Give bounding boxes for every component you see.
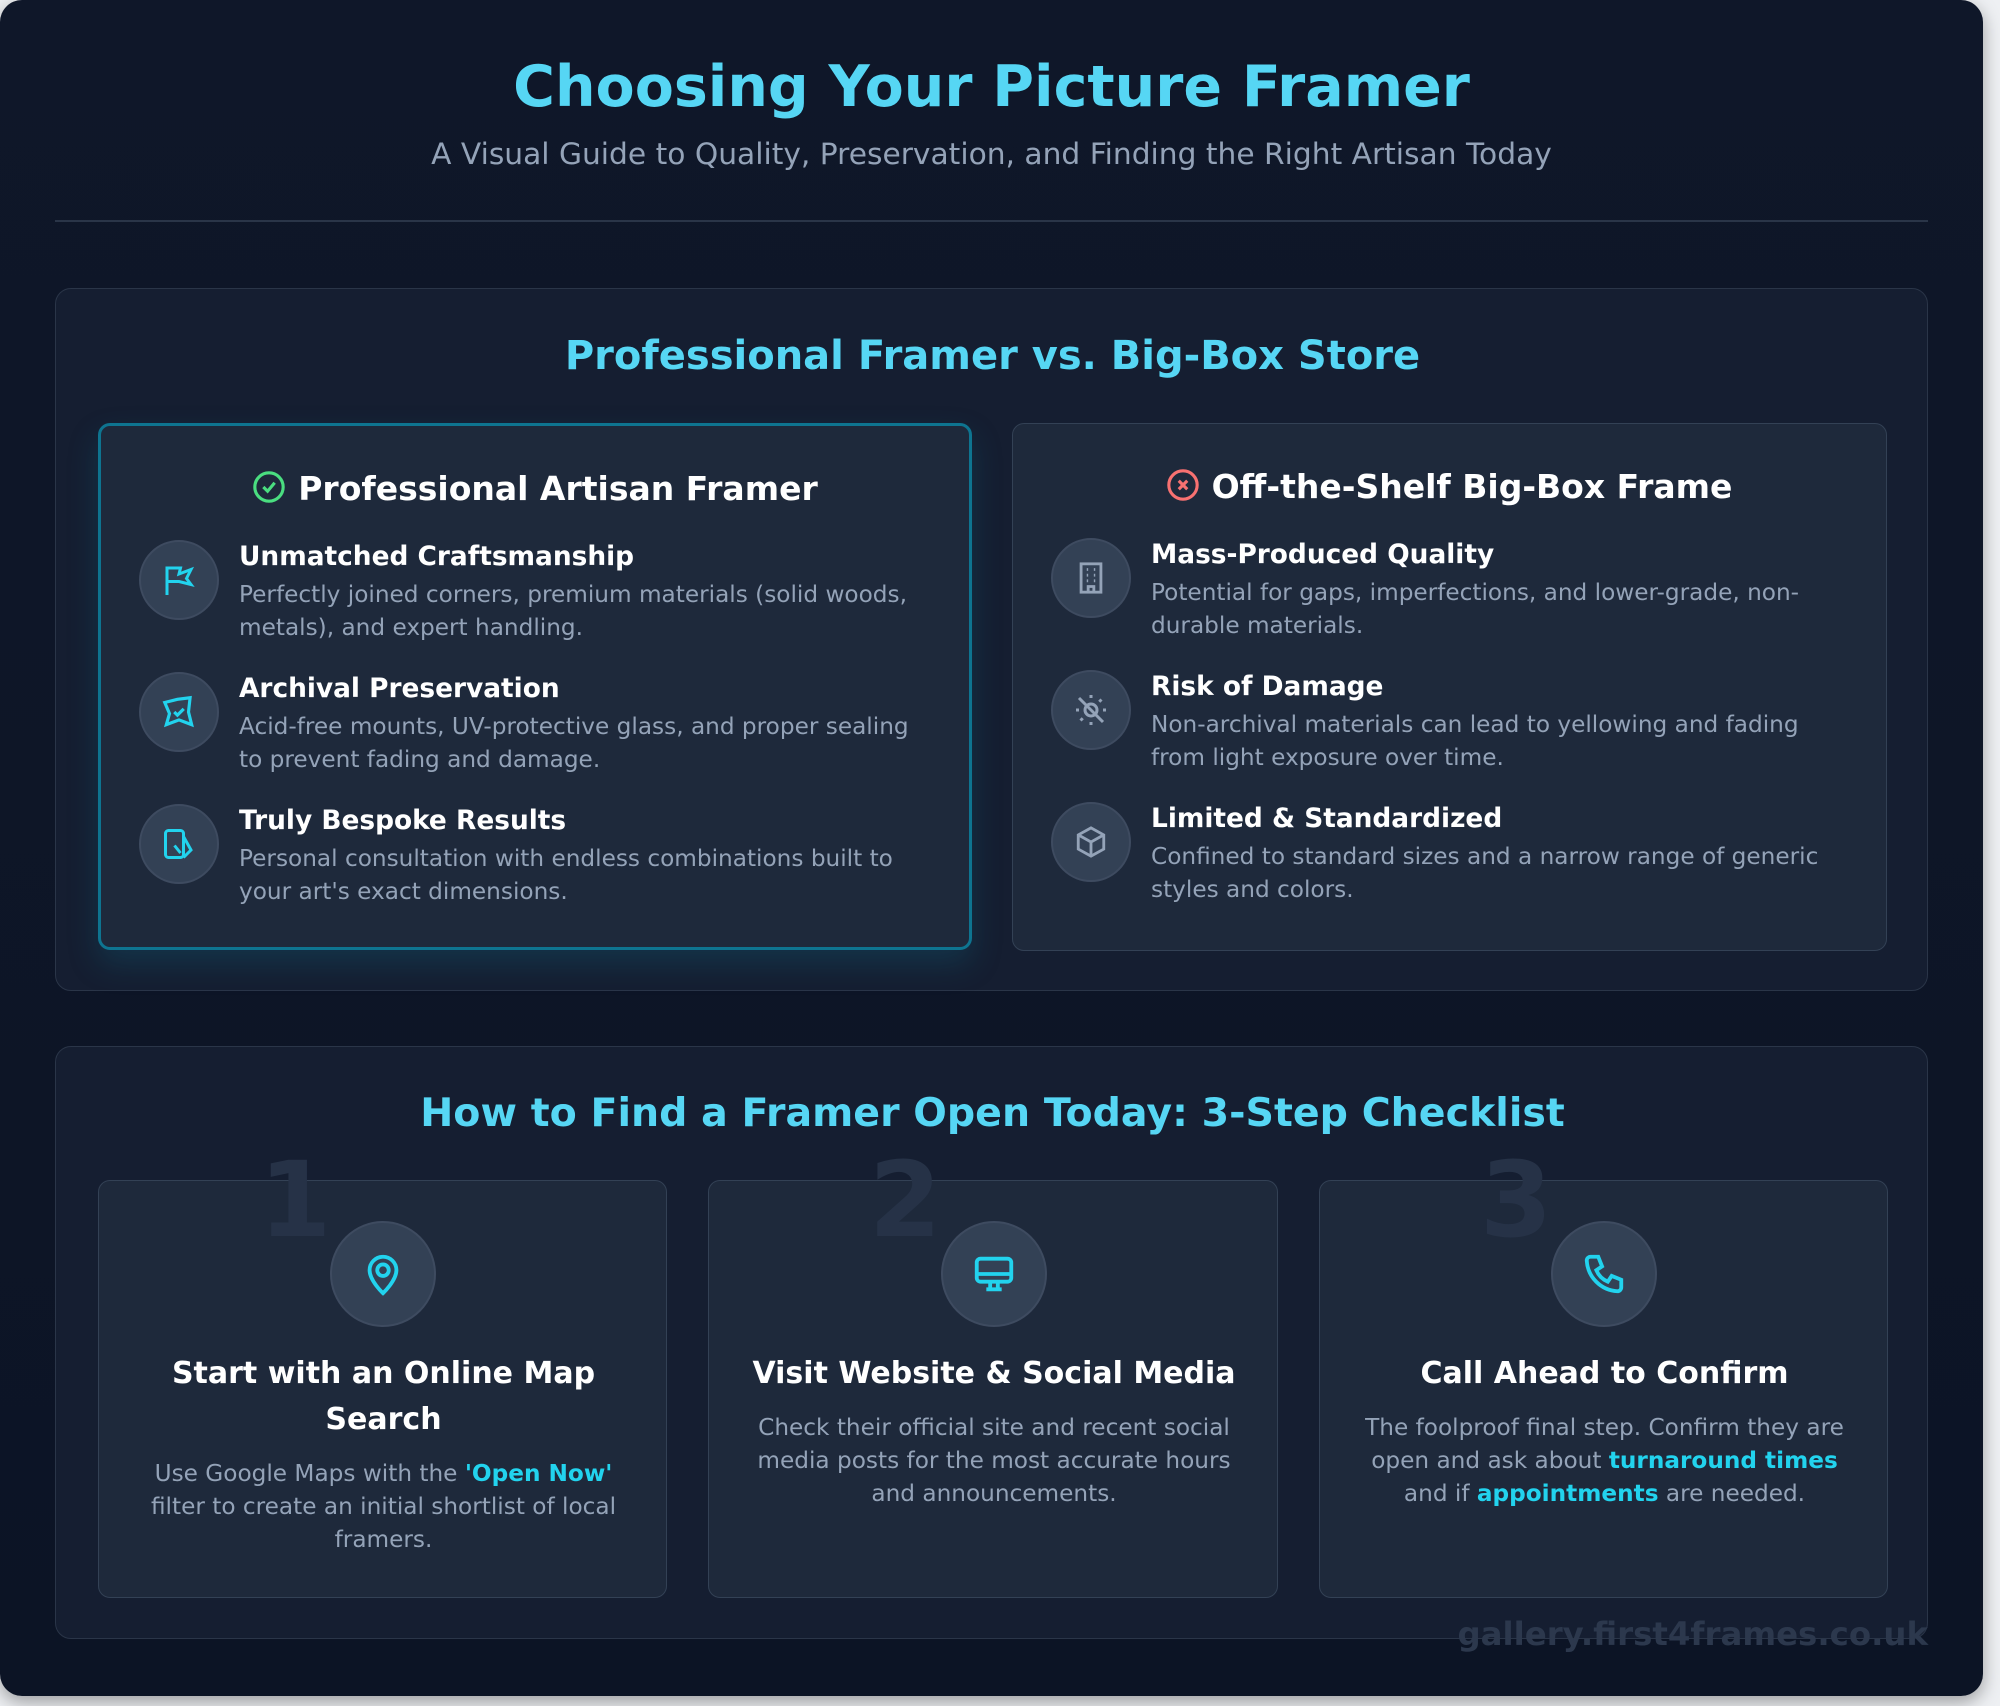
step 1 text: Use Google Maps with the 'Open Now' filter to create an initial shortlist of local framers. [151, 1460, 616, 1553]
item: mass-produced [1051, 538, 1799, 639]
item: archival [139, 672, 909, 773]
number 3: 3 [1480, 1139, 1552, 1261]
subtitle: A Visual Guide to Quality, Preservation, and Finding the Right Artisan Today [431, 137, 1552, 172]
watermark: gallery.first4frames.co.uk [1457, 1615, 1928, 1653]
item: bespoke [139, 804, 893, 905]
panel: comparison [55, 288, 1928, 991]
step 3 text: The foolproof final step. Confirm they are open and ask about turnaround times and if appointments are needed. [1365, 1414, 1844, 1507]
item: archival: Acid-free mounts, UV-protective glass, and proper sealing to prevent fading and damage. [239, 713, 909, 773]
item: bespoke: Truly Bespoke Results [239, 805, 566, 836]
step 2 [708, 1180, 1278, 1598]
item: limited: Confined to standard sizes and a narrow range of generic styles and colors. [1151, 843, 1818, 903]
item: mass-produced: Potential for gaps, imperfections, and lower-grade, non-durable materials. [1151, 579, 1799, 639]
step 3 text [1365, 1356, 1844, 1507]
item: damage: Risk of Damage [1151, 671, 1383, 702]
item: bespoke: Personal consultation with endless combinations built to your art's exact dimensions. [239, 845, 893, 905]
item: mass-produced: Mass-Produced Quality [1151, 539, 1494, 570]
card: professional [98, 423, 972, 950]
item: limited [1051, 802, 1818, 903]
step 2 text [752, 1356, 1236, 1507]
number 1: 1 [259, 1139, 331, 1261]
item: archival: Archival Preservation [239, 673, 560, 704]
title: Choosing Your Picture Framer [513, 54, 1470, 120]
step 2 text: Visit Website & Social Media [752, 1356, 1236, 1391]
item: damage [1051, 670, 1799, 771]
card heading: Off-the-Shelf Big-Box Frame [1212, 467, 1732, 506]
item: craftsmanship: Perfectly joined corners, premium materials (solid woods, metals), and expert handling. [239, 581, 907, 641]
step 2 text: Check their official site and recent social media posts for the most accurate hours and announcements. [757, 1414, 1231, 1507]
step 3 [1319, 1180, 1888, 1598]
item: craftsmanship [139, 540, 907, 641]
card heading: Professional Artisan Framer [298, 469, 818, 508]
item: damage: Non-archival materials can lead to yellowing and fading from light exposure over time. [1151, 711, 1799, 771]
panel: checklist [55, 1046, 1928, 1639]
comparison heading: Professional Framer vs. Big-Box Store [565, 333, 1420, 379]
step 1 text: Start with an Online Map Search [172, 1356, 595, 1437]
checklist heading: How to Find a Framer Open Today: 3-Step Checklist [420, 1090, 1565, 1136]
step 3 text: Call Ahead to Confirm [1420, 1356, 1789, 1391]
icon: monitor [941, 1221, 1047, 1327]
item: craftsmanship: Unmatched Craftsmanship [239, 541, 634, 572]
icon: phone [1551, 1221, 1657, 1327]
card: big-box [1012, 423, 1887, 951]
icon: map pin [330, 1221, 436, 1327]
step 1 [98, 1180, 667, 1598]
number 2: 2 [869, 1139, 941, 1261]
step 1 text [151, 1356, 616, 1553]
item: limited: Limited & Standardized [1151, 803, 1502, 834]
